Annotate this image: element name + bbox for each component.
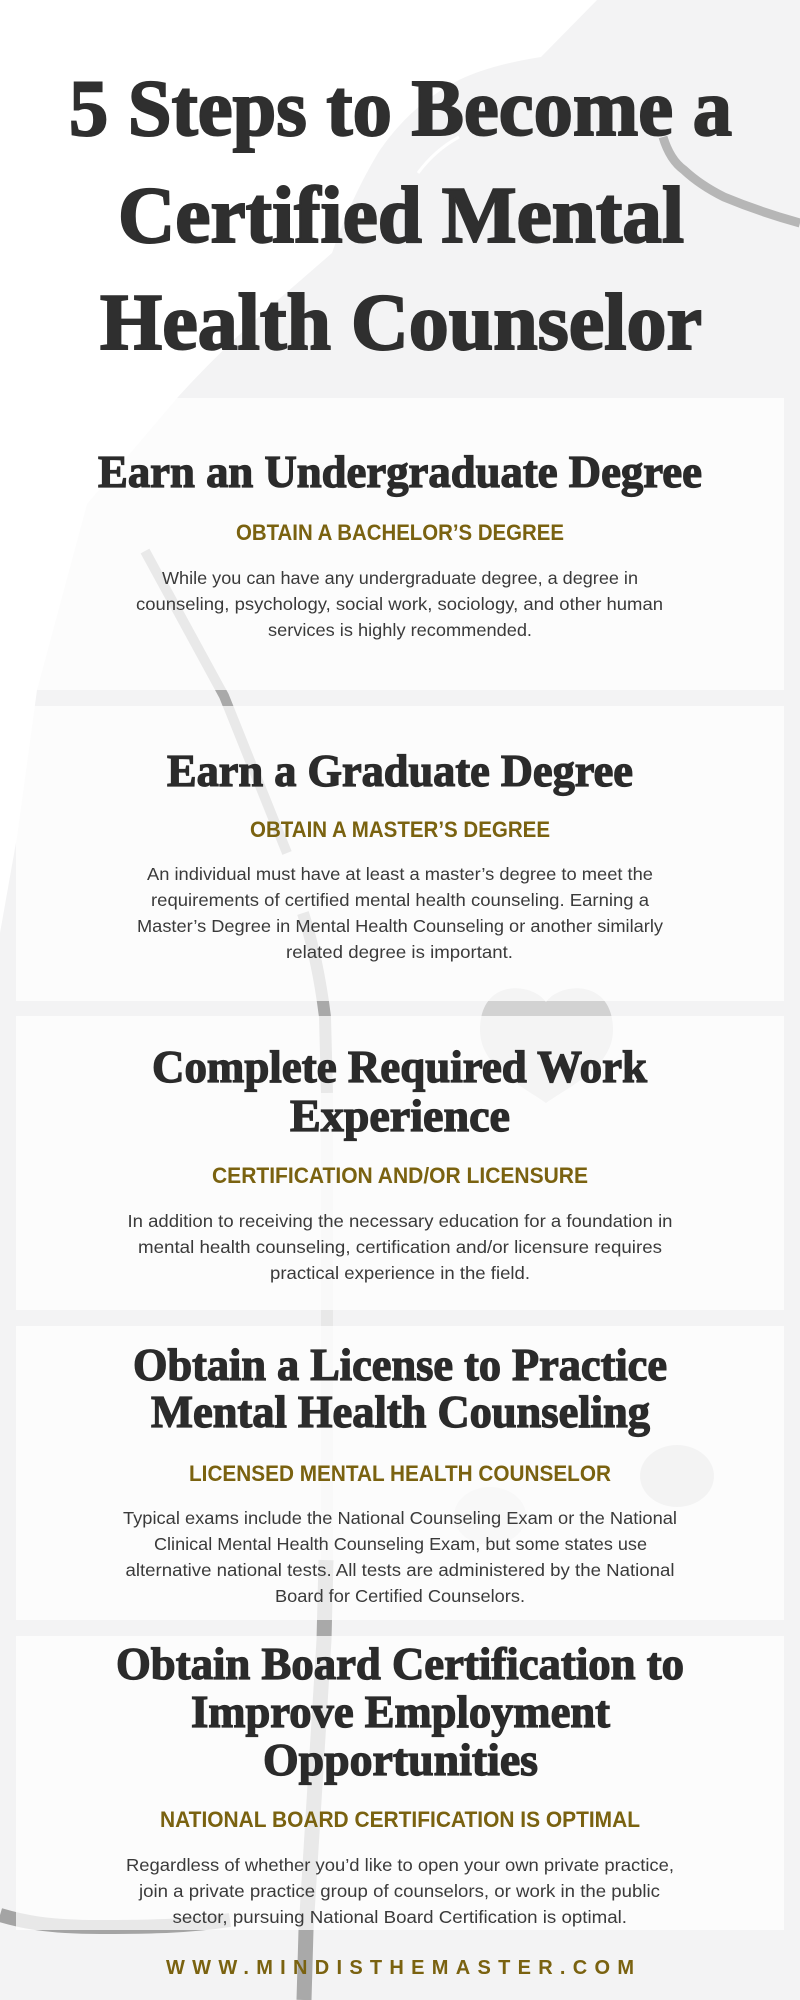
step 5 body text xyxy=(126,1855,674,1927)
step 3 subheading: CERTIFICATION AND/OR LICENSURE xyxy=(212,1163,588,1188)
step 1 heading: Earn an Undergraduate Degree xyxy=(98,446,702,497)
title: Health Counselor xyxy=(100,279,702,367)
step 1 body text xyxy=(136,568,663,640)
step 1 body text: While you can have any undergraduate degree, a degree in xyxy=(162,568,638,588)
step 3 body text: mental health counseling, certification and/or licensure requires xyxy=(138,1237,662,1257)
title: Certified Mental xyxy=(118,172,684,260)
step 1 body text: services is highly recommended. xyxy=(268,620,532,640)
step 2 body text: requirements of certified mental health counseling. Earning a xyxy=(151,890,649,910)
step 3 heading: Experience xyxy=(290,1090,510,1141)
step 5 body text: join a private practice group of counselors, or work in the public xyxy=(138,1881,660,1901)
panel: step 2 xyxy=(16,706,784,1001)
step 3 body text: practical experience in the field. xyxy=(270,1263,530,1283)
step 5 heading: Improve Employment xyxy=(191,1686,611,1737)
step 5 heading xyxy=(116,1638,684,1785)
decorative brush stroke: vertical xyxy=(303,913,327,2000)
decorative circle: right xyxy=(640,1445,714,1507)
decorative brush stroke: long diagonal xyxy=(145,551,287,853)
step 2 subheading: OBTAIN A MASTER’S DEGREE xyxy=(250,817,550,842)
footer website: WWW.MINDISTHEMASTER.COM xyxy=(166,1957,634,1979)
decorative brush stroke: top right xyxy=(663,137,800,223)
step 5 subheading: NATIONAL BOARD CERTIFICATION IS OPTIMAL xyxy=(160,1807,640,1832)
step 4 body text: Board for Certified Counselors. xyxy=(275,1586,525,1606)
title xyxy=(69,65,732,367)
step 5 body text: sector, pursuing National Board Certification is optimal. xyxy=(172,1907,627,1927)
step 1 subheading: OBTAIN A BACHELOR’S DEGREE xyxy=(236,520,564,545)
step 5 heading: Obtain Board Certification to xyxy=(116,1638,684,1689)
step 2 body text: Master’s Degree in Mental Health Counseling or another similarly xyxy=(137,916,663,936)
panel: step 4 xyxy=(16,1326,784,1620)
panel: step 3 xyxy=(16,1016,784,1310)
step 4 heading: Obtain a License to Practice xyxy=(133,1339,667,1390)
decorative circle: middle xyxy=(454,1487,526,1545)
step 3 heading: Complete Required Work xyxy=(152,1041,647,1092)
step 3 body text xyxy=(128,1211,672,1283)
step 4 body text: Clinical Mental Health Counseling Exam, but some states use xyxy=(154,1534,647,1554)
step 2 body text: related degree is important. xyxy=(286,942,513,962)
icon: heart xyxy=(480,988,613,1103)
step 5 body text: Regardless of whether you’d like to open your own private practice, xyxy=(126,1855,674,1875)
step 4 heading: Mental Health Counseling xyxy=(151,1386,650,1437)
step 3 heading xyxy=(152,1041,647,1141)
panel: step 1 xyxy=(16,398,784,690)
step 4 body text xyxy=(123,1508,677,1606)
step 2 body text xyxy=(137,864,663,962)
step 2 heading: Earn a Graduate Degree xyxy=(167,745,633,796)
step 5 heading: Opportunities xyxy=(263,1734,538,1785)
step 4 body text: Typical exams include the National Counseling Exam or the National xyxy=(123,1508,677,1528)
decorative brush stroke: bottom left xyxy=(0,1915,230,1927)
step 4 subheading: LICENSED MENTAL HEALTH COUNSELOR xyxy=(189,1461,611,1486)
step 4 heading xyxy=(133,1339,667,1437)
step 1 body text: counseling, psychology, social work, sociology, and other human xyxy=(136,594,663,614)
step 4 body text: alternative national tests. All tests are administered by the National xyxy=(126,1560,674,1580)
panel: step 5 xyxy=(16,1636,784,1930)
step 3 body text: In addition to receiving the necessary education for a foundation in xyxy=(128,1211,672,1231)
title: 5 Steps to Become a xyxy=(69,65,732,153)
step 2 body text: An individual must have at least a master’s degree to meet the xyxy=(147,864,653,884)
